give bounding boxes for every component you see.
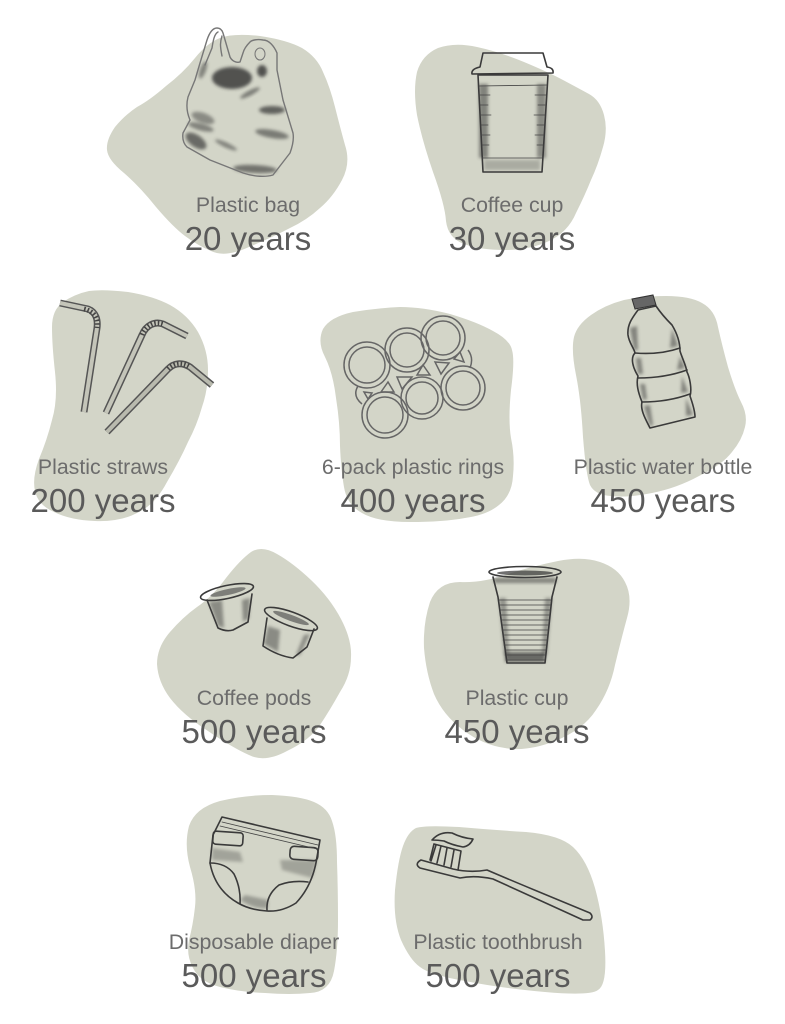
icon: coffee pods xyxy=(199,580,320,658)
value: 500 years: 500 years xyxy=(182,957,326,994)
blob: coffee pods xyxy=(157,549,351,758)
label: plastic water bottle: Plastic water bottle xyxy=(574,455,752,479)
value: 500 years: 500 years xyxy=(426,957,570,994)
blob: coffee cup xyxy=(415,45,606,250)
panel: coffee cup xyxy=(415,45,606,257)
blob: rings xyxy=(320,307,514,522)
blob: bottle xyxy=(573,296,746,497)
panel: coffee pods xyxy=(157,549,351,758)
blob: diaper xyxy=(187,795,338,994)
icon: plastic cup xyxy=(489,566,561,663)
panel: disposable diaper xyxy=(169,795,339,994)
value: 200 years: 200 years xyxy=(31,482,175,519)
blob: plastic cup xyxy=(424,559,630,749)
blob: plastic bag xyxy=(107,35,347,254)
label: plastic bag: Plastic bag xyxy=(196,193,300,217)
value: 500 years: 500 years xyxy=(182,713,326,750)
panel: water bottle xyxy=(573,295,752,519)
value: 450 years: 450 years xyxy=(591,482,735,519)
label: plastic straws: Plastic straws xyxy=(38,455,168,479)
icon: six-pack rings xyxy=(344,316,485,438)
panel: toothbrush xyxy=(395,826,605,994)
icon: plastic straws xyxy=(60,303,212,432)
label: coffee cup: Coffee cup xyxy=(461,193,563,217)
blob: toothbrush xyxy=(395,826,605,994)
label: plastic toothbrush: Plastic toothbrush xyxy=(413,930,583,954)
icon: toothbrush xyxy=(417,833,592,920)
label: 6-pack plastic rings: 6-pack plastic rings xyxy=(322,455,504,479)
value: 20 years: 20 years xyxy=(185,220,311,257)
label: disposable diaper: Disposable diaper xyxy=(169,930,339,954)
value: 30 years: 30 years xyxy=(449,220,575,257)
panel: plastic bag xyxy=(107,28,347,257)
label: coffee pods: Coffee pods xyxy=(197,686,311,710)
icon: water bottle xyxy=(628,295,695,428)
panel: plastic cup xyxy=(424,559,630,750)
label: plastic cup: Plastic cup xyxy=(466,686,568,710)
icon: disposable diaper xyxy=(210,817,320,911)
value: 400 years: 400 years xyxy=(341,482,485,519)
panel: plastic straws xyxy=(31,290,212,521)
blob: plastic straws xyxy=(34,290,208,521)
value: 450 years: 450 years xyxy=(445,713,589,750)
icon: coffee cup xyxy=(472,53,553,172)
icon: plastic bag xyxy=(183,28,293,176)
panel: 6-pack rings xyxy=(320,307,514,522)
